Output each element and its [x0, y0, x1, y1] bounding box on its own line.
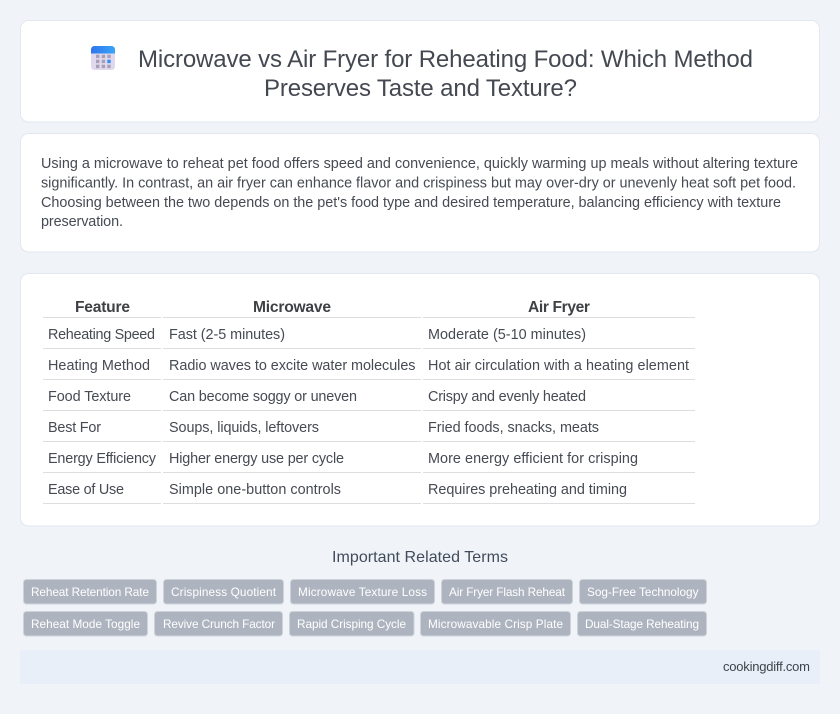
text block: summary paragraph: Using a microwave to reheat pet food offers speed and convenience, quickly warming up meals without altering texture [41, 156, 798, 172]
table header [75, 299, 590, 316]
row: energy efficiency: More energy efficient for crisping [428, 451, 638, 467]
tags: related terms: Microwave Texture Loss [298, 585, 427, 599]
icon: calendar [91, 46, 115, 70]
panel: summary [20, 134, 820, 252]
panel: comparison table [20, 274, 820, 526]
title: Microwave vs Air Fryer for Reheating Food: Which Method [138, 46, 753, 73]
panel: header [20, 20, 820, 122]
row: best for: Best For [48, 420, 101, 436]
row: best for [48, 420, 599, 436]
tags: related terms: Microwavable Crisp Plate [428, 617, 563, 631]
row: ease of use: Requires preheating and timing [428, 482, 627, 498]
row: best for: Soups, liquids, leftovers [169, 420, 319, 436]
row: energy efficiency: Energy Efficiency [48, 451, 157, 467]
title: Preserves Taste and Texture? [264, 75, 577, 102]
row: best for: Fried foods, snacks, meats [428, 420, 599, 436]
table header: Microwave [253, 299, 331, 316]
tags: related terms: Dual-Stage Reheating [585, 617, 699, 631]
row: heating method: Radio waves to excite water molecules [169, 358, 416, 374]
tags: related terms: Reheat Mode Toggle [31, 617, 140, 631]
text block: summary paragraph: significantly. In contrast, an air fryer can enhance flavor and crispiness but may over-dry or unevenly heat soft pet food. [41, 176, 796, 192]
row: reheating speed: Reheating Speed [48, 327, 155, 343]
tags: related terms: Rapid Crisping Cycle [297, 617, 406, 631]
tags: related terms: Air Fryer Flash Reheat [449, 585, 566, 599]
footer: cookingdiff.com [723, 659, 810, 674]
text block: summary paragraph: Choosing between the two depends on the pet's food type and desired temperature, balancing efficiency with texture [41, 195, 781, 211]
row: energy efficiency: Higher energy use per cycle [169, 451, 344, 467]
text block: summary paragraph [41, 156, 798, 230]
tags: related terms: Crispiness Quotient [171, 585, 277, 599]
heading: related terms: Important Related Terms [332, 549, 508, 566]
row: ease of use [48, 482, 627, 498]
text block: summary paragraph: preservation. [41, 214, 123, 230]
tags: related terms: Revive Crunch Factor [163, 617, 275, 631]
tags: related terms: Reheat Retention Rate [31, 585, 149, 599]
row: ease of use: Simple one-button controls [169, 482, 341, 498]
row: food texture: Can become soggy or uneven [169, 389, 357, 405]
row: food texture [48, 389, 586, 405]
row: heating method: Hot air circulation with a heating element [428, 358, 689, 374]
row: heating method: Heating Method [48, 358, 150, 374]
tags: related terms [24, 580, 706, 636]
row: energy efficiency [48, 451, 638, 467]
table header: Air Fryer [528, 299, 590, 316]
row: food texture: Food Texture [48, 389, 131, 405]
title [138, 46, 753, 102]
table header: Feature [75, 299, 130, 316]
tags: related terms: Sog-Free Technology [587, 585, 699, 599]
row: reheating speed: Fast (2-5 minutes) [169, 327, 285, 343]
row: reheating speed: Moderate (5-10 minutes) [428, 327, 586, 343]
row: food texture: Crispy and evenly heated [428, 389, 586, 405]
row: reheating speed [48, 327, 586, 343]
row: ease of use: Ease of Use [48, 482, 124, 498]
footer [20, 650, 820, 684]
row: heating method [48, 358, 689, 374]
